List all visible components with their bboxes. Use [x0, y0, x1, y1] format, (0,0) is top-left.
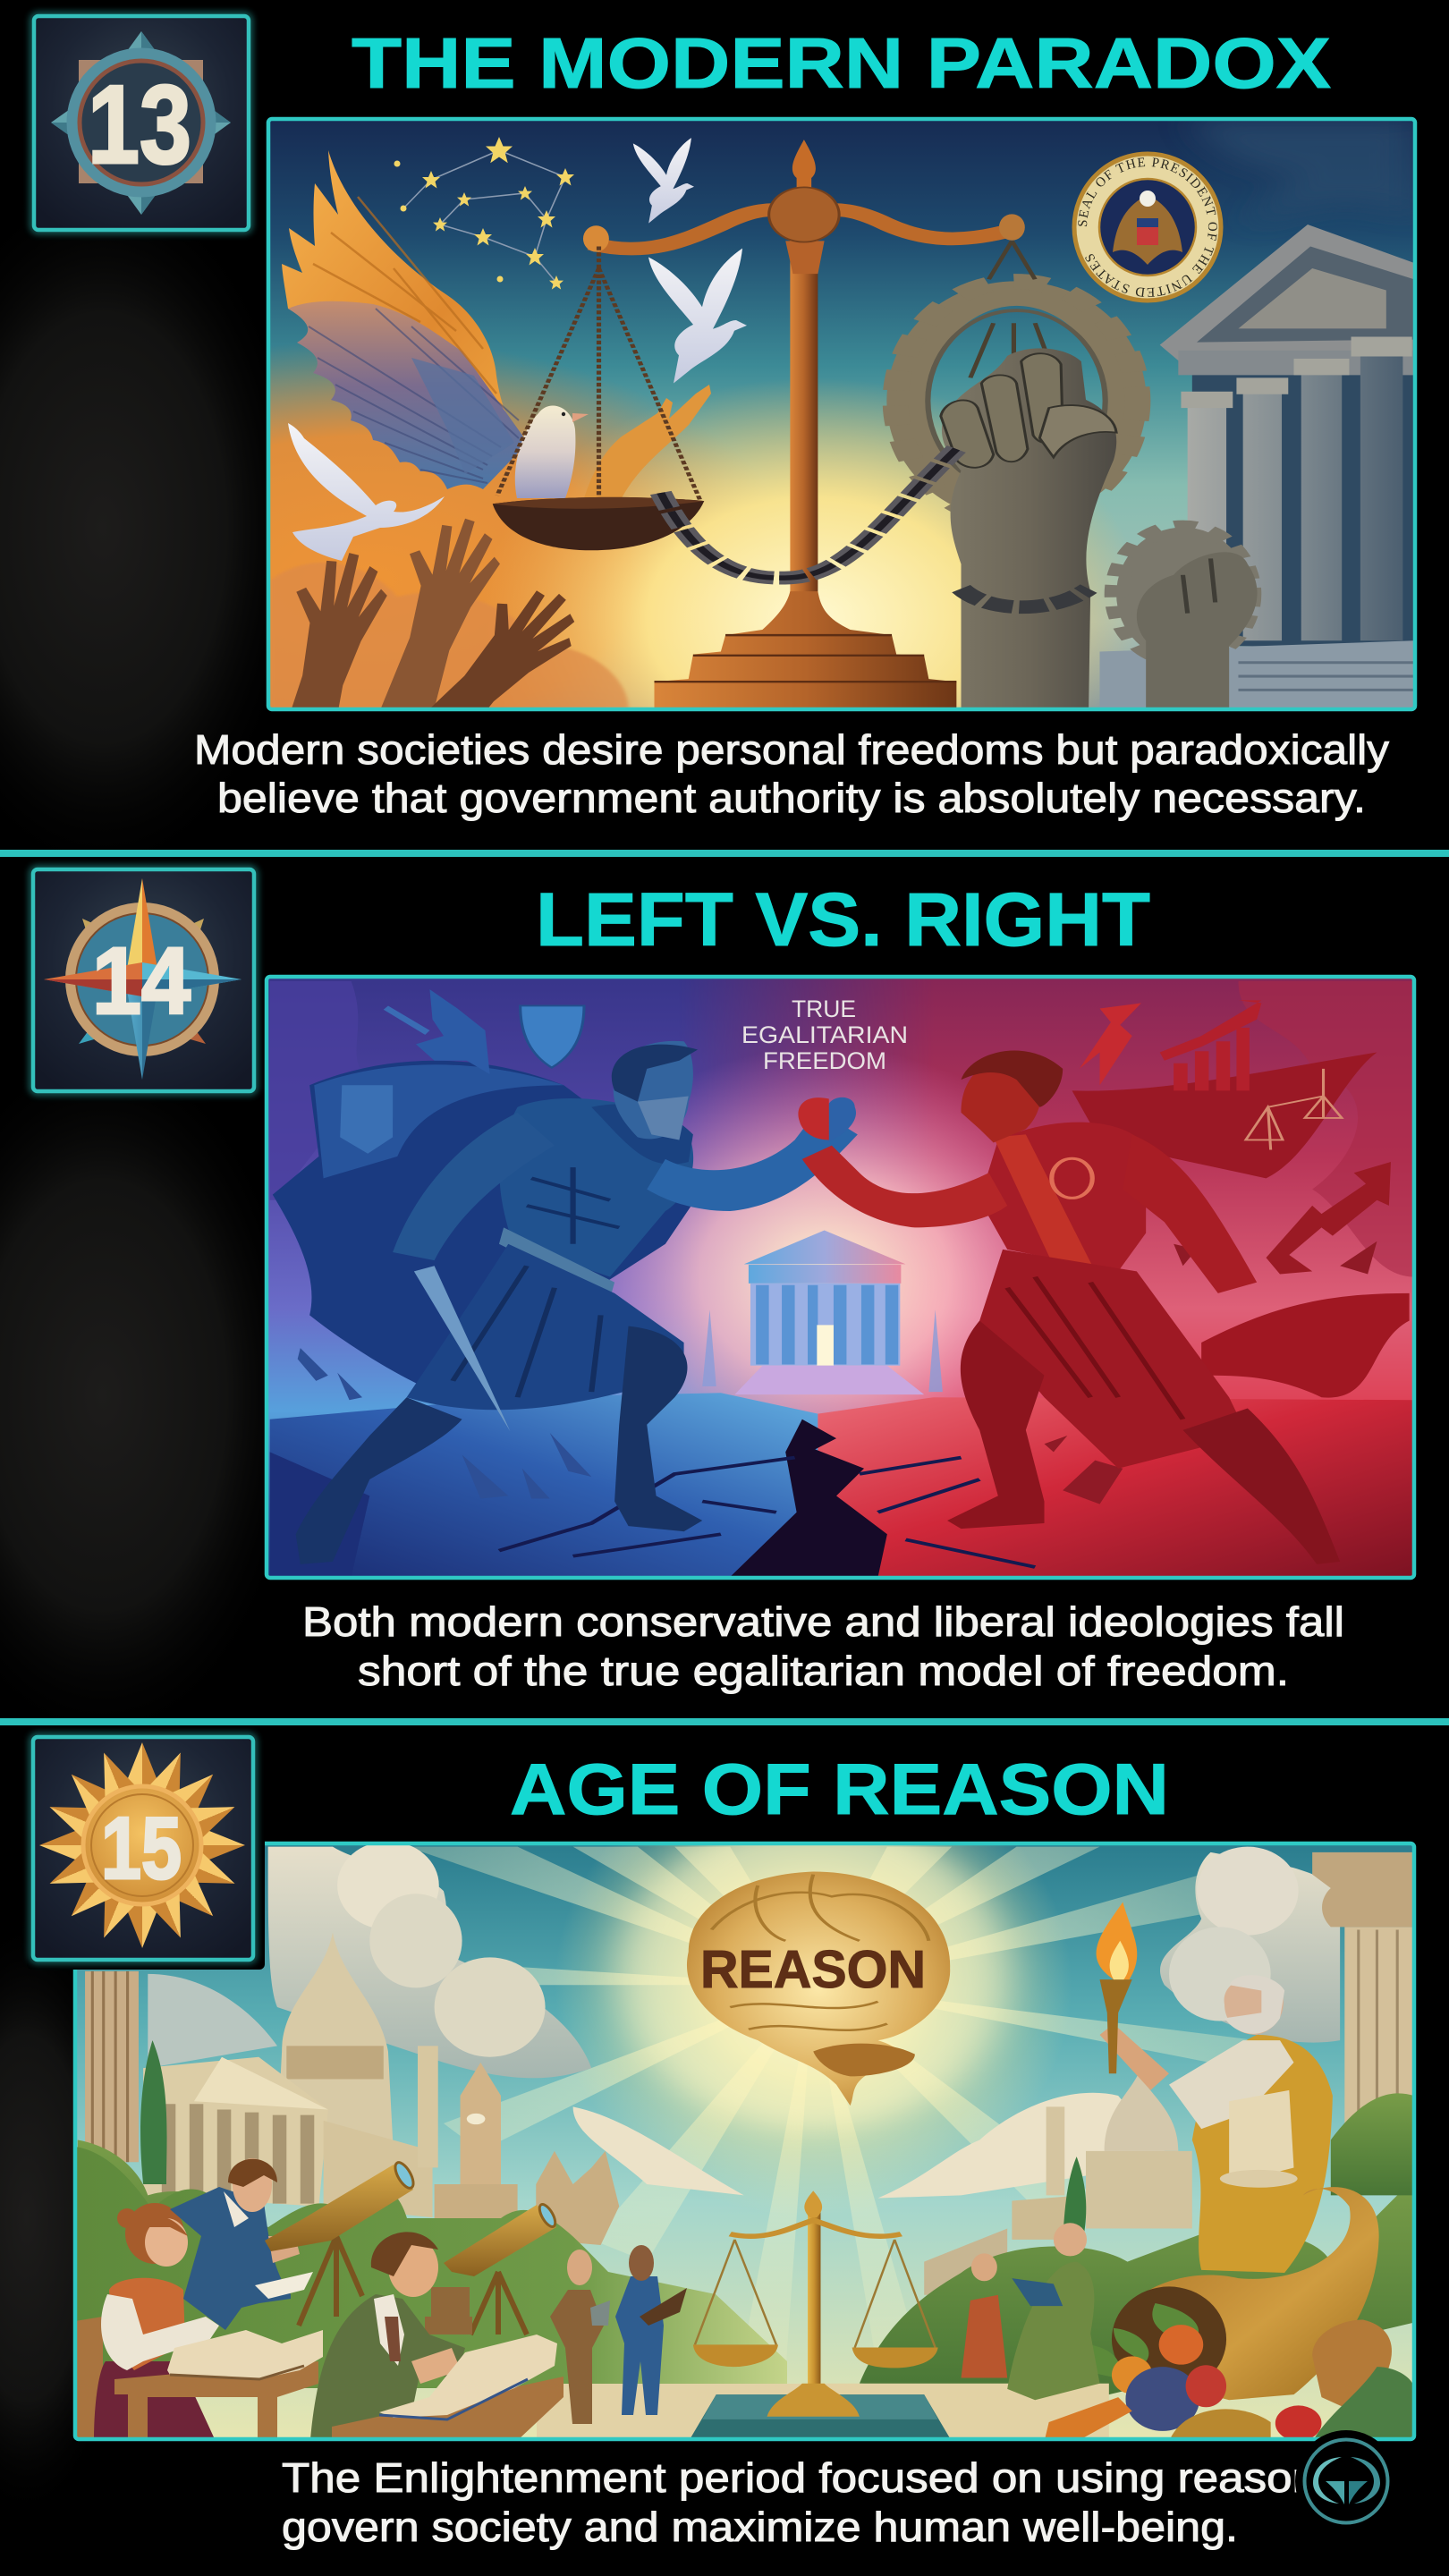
temple — [702, 1230, 943, 1394]
fruit pile — [1045, 2303, 1414, 2442]
right icons — [1080, 1000, 1391, 1274]
hillside behind scholars — [75, 2147, 787, 2388]
backdrop — [263, 976, 1419, 1580]
brain label: REASON — [700, 1940, 926, 1999]
section 13: the modern paradox — [25, 7, 1417, 821]
sky — [263, 115, 1419, 712]
scale — [493, 140, 1025, 708]
description: modern societies — [194, 726, 1389, 821]
two standing men — [550, 2245, 687, 2424]
gear — [895, 241, 1138, 521]
reaching hands — [292, 519, 574, 708]
distant figures at right — [962, 2223, 1100, 2400]
description: both ideologies: Both modern conservative and liberal ideologies fall — [302, 1598, 1344, 1645]
badge 14: 14 — [92, 928, 191, 1034]
panel: scales of freedom and authority — [270, 121, 1413, 708]
caption in the picture: FREEDOM — [763, 1047, 886, 1074]
wing — [282, 150, 528, 489]
doves — [288, 138, 747, 561]
left desk — [114, 2330, 323, 2439]
red titan — [802, 1051, 1410, 1564]
badge 15 — [27, 1730, 265, 1970]
section 15: age of reason — [27, 1730, 1419, 2550]
woman taking notes — [94, 2203, 219, 2439]
bench behind woman — [75, 2317, 103, 2439]
panel: blue and red titans — [263, 976, 1419, 1580]
title: left vs right: LEFT VS. RIGHT — [536, 877, 1150, 962]
golden scale and plinth — [689, 2190, 952, 2442]
badge 13: 13 — [88, 64, 191, 187]
plaza floor — [537, 2384, 818, 2439]
left classical buildings — [140, 1933, 619, 2245]
description: both ideologies — [302, 1598, 1344, 1694]
badge 14 — [32, 869, 255, 1092]
clasped hands — [798, 1097, 856, 1143]
foliage — [78, 2093, 1414, 2394]
panel: enlightenment scene — [69, 1819, 1419, 2445]
badge 15: 15 — [101, 1799, 182, 1897]
title: age of reason: AGE OF REASON — [510, 1750, 1169, 1830]
description: the enlightenment: The Enlightenment period focused on using reason to — [282, 2454, 1368, 2501]
right desk and open book — [332, 2334, 564, 2439]
right column — [1312, 1852, 1414, 2179]
temple — [1100, 225, 1414, 708]
clouds — [148, 1841, 1340, 2198]
left icons — [384, 989, 584, 1074]
logo emblem — [1295, 2430, 1397, 2532]
title: the modern paradox: THE MODERN PARADOX — [352, 23, 1331, 103]
description: modern societies: believe that government authority is absolutely necessary. — [217, 775, 1366, 821]
torch-bearing philosopher — [1097, 1902, 1333, 2273]
cracked ground — [270, 1241, 1414, 1577]
cornucopia — [1112, 2187, 1392, 2414]
young man writing — [310, 2232, 465, 2439]
section 14: left vs right — [32, 869, 1419, 1694]
perched bird — [515, 406, 589, 498]
description: the enlightenment: govern society and maximize human well-being. — [282, 2504, 1238, 2550]
small fist with gear — [1116, 528, 1258, 708]
caption in the picture: EGALITARIAN — [741, 1021, 908, 1048]
sky and sunburst — [69, 1841, 1419, 2445]
blue titan — [273, 1041, 858, 1564]
telescope right — [444, 2202, 558, 2334]
caption in the picture — [741, 996, 908, 1074]
right distant buildings — [924, 2073, 1192, 2295]
constellation — [394, 137, 574, 290]
left column — [85, 1971, 139, 2162]
brain with glow — [619, 1819, 1007, 2129]
stack of books — [425, 2287, 472, 2334]
caption in the picture: TRUE — [792, 996, 856, 1022]
large stone fist — [661, 348, 1116, 708]
description: modern societies: Modern societies desire personal freedoms but paradoxically — [194, 726, 1389, 773]
scale, gear, fists, temple and hands — [247, 140, 1414, 809]
presidential seal: SEAL OF THE PRESIDENT OF THE UNITED STATES — [1078, 157, 1217, 297]
standing scholar — [170, 2158, 313, 2330]
badge 13 — [33, 15, 250, 231]
telescope left — [265, 2160, 417, 2326]
hand under the dove — [584, 385, 711, 498]
plaza right — [813, 2384, 1109, 2442]
description: both ideologies: short of the true egalitarian model of freedom. — [358, 1648, 1289, 1694]
description: the enlightenment — [282, 2454, 1368, 2550]
